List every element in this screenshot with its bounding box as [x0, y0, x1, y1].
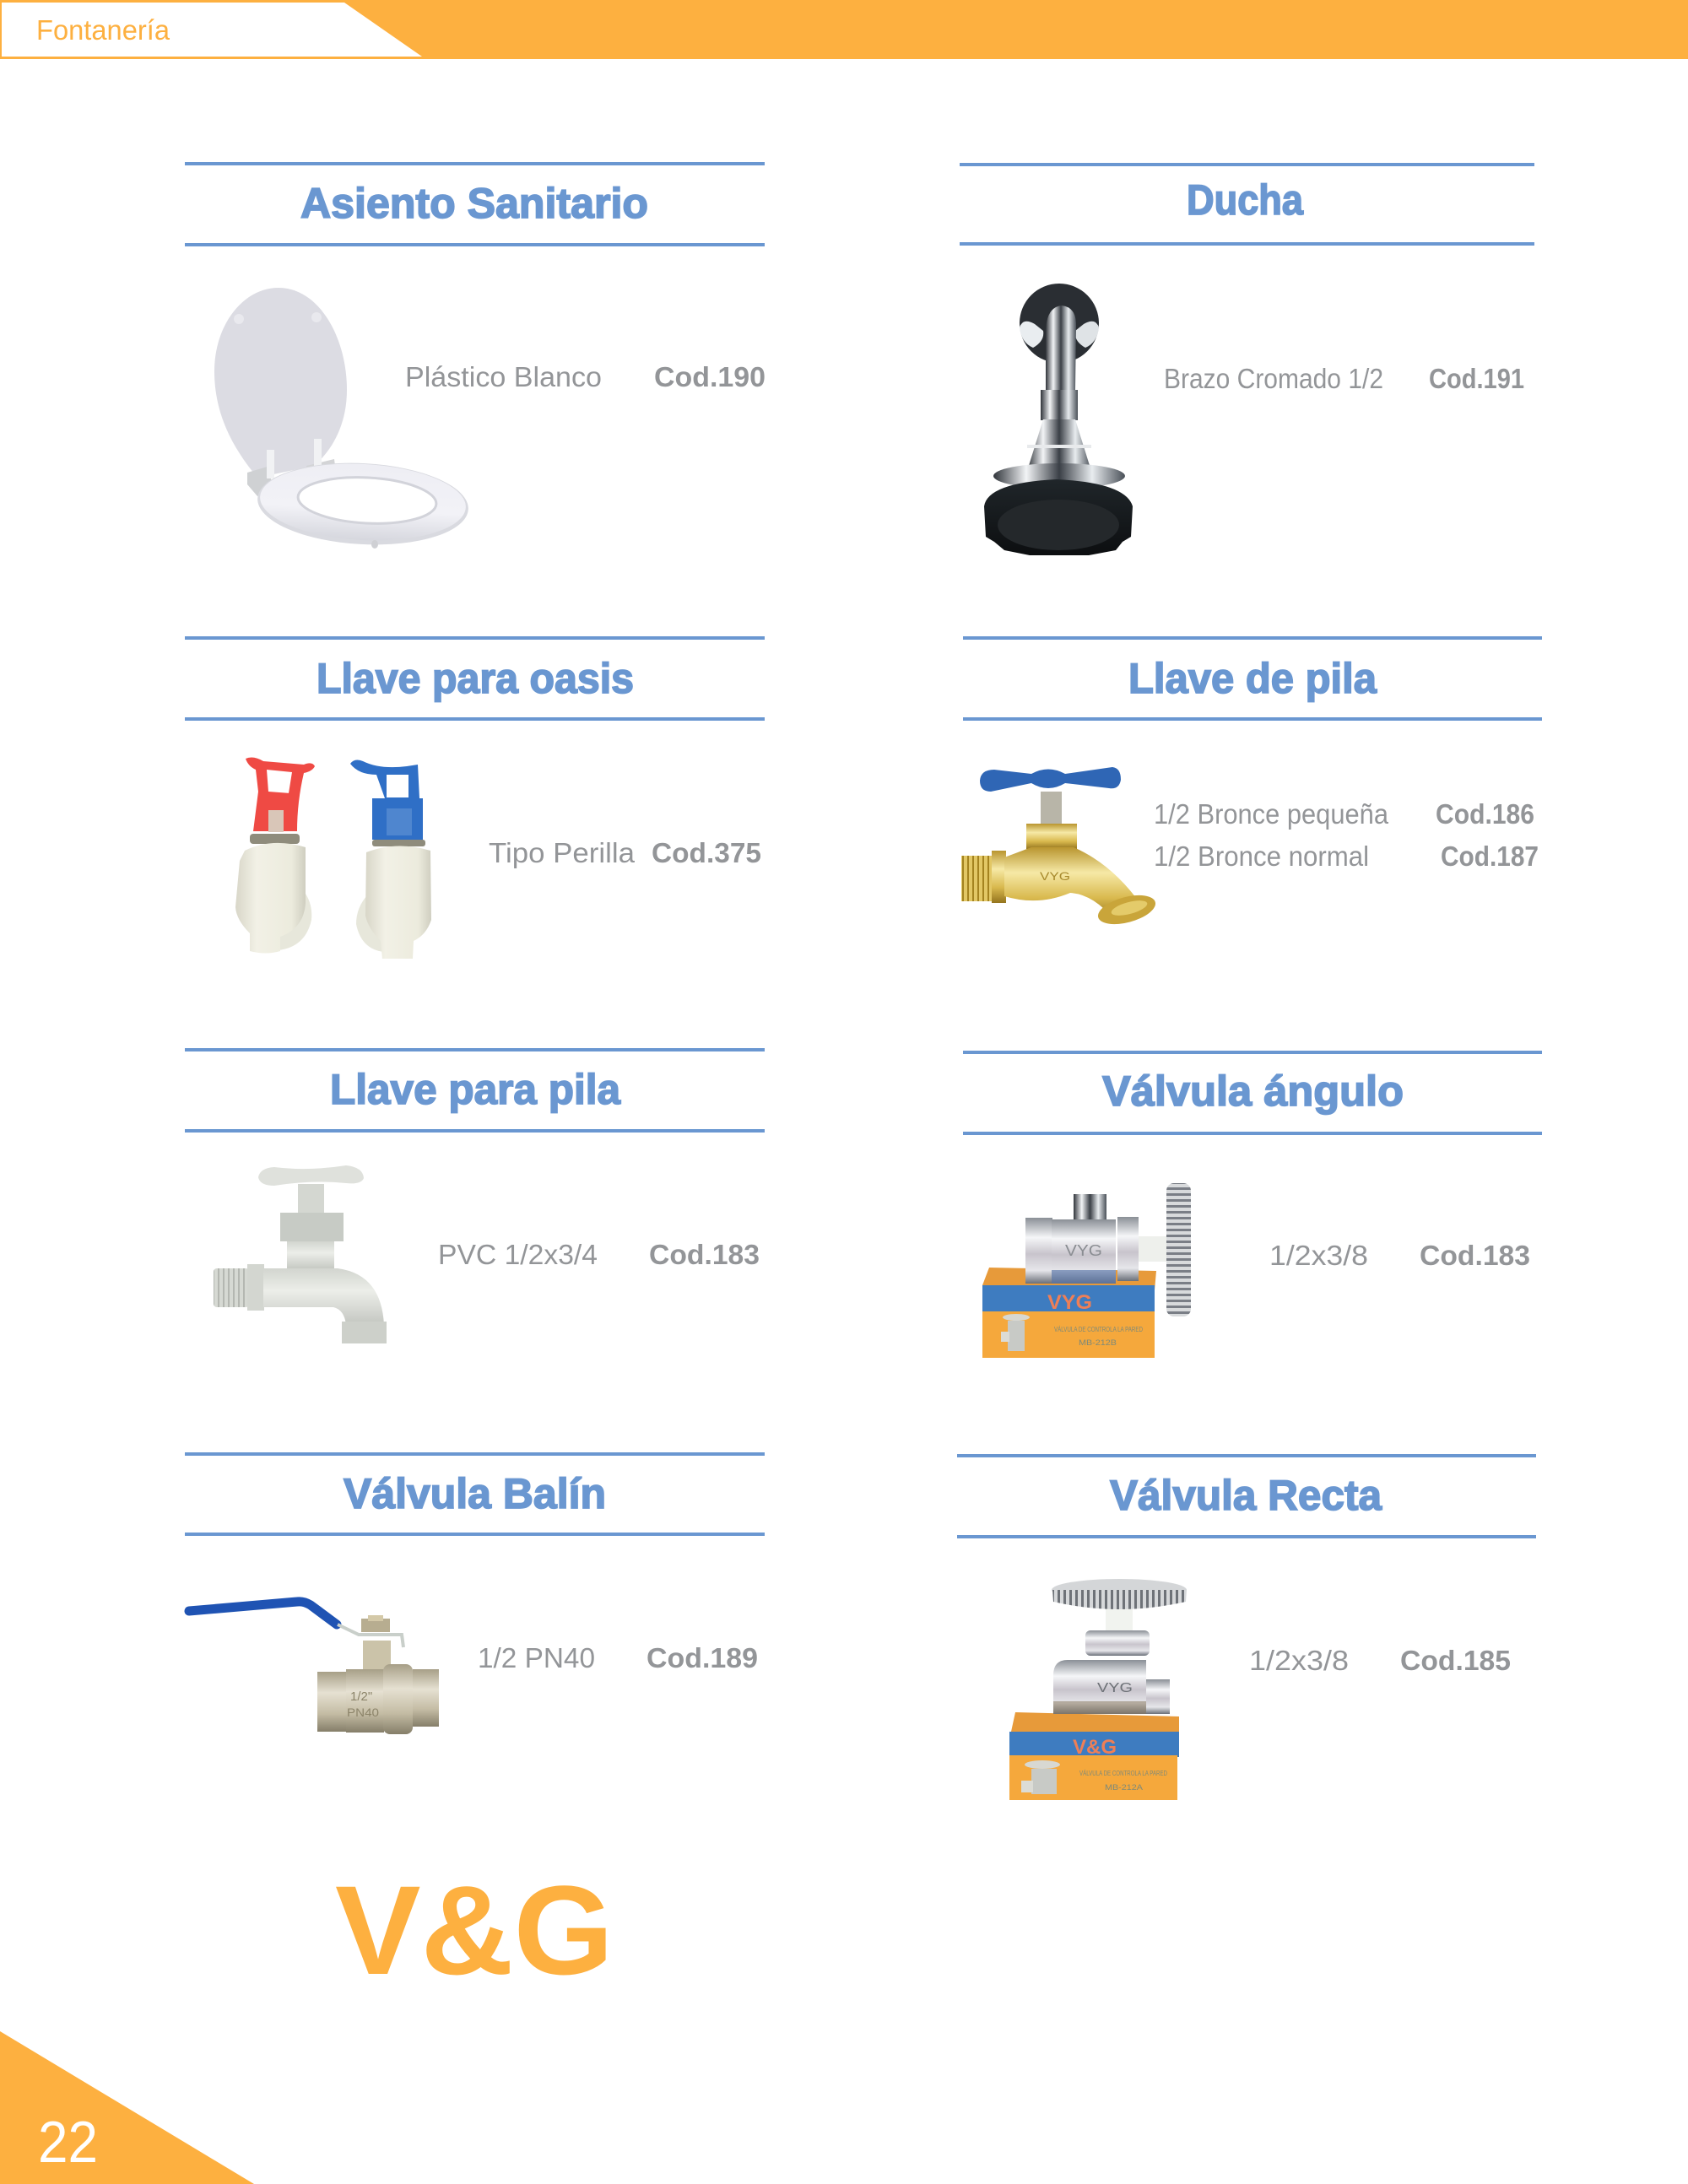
panel: Válvula Recta: [957, 1454, 1536, 1800]
panel: Llave para pila: [185, 1048, 765, 1343]
icon: blue tap: [350, 760, 431, 959]
panel: Llave para oasis: [185, 636, 765, 959]
page number: 22: [38, 2109, 98, 2175]
icon: ball valve: 1/2": [350, 1689, 372, 1704]
icon: angle valve with box: VÁLVULA DE CONTROLA LA PARED: [1054, 1326, 1143, 1333]
heading: Llave para pila: Llave para pila: [330, 1066, 621, 1113]
brand logo: V&G: V&G: [335, 1859, 614, 2001]
product code: Cod.183: [649, 1239, 760, 1270]
icon: shower head: [984, 284, 1133, 555]
product description: 1/2 Bronce pequeña: [1154, 798, 1389, 830]
product description: 1/2x3/8: [1249, 1645, 1349, 1676]
product description: PVC 1/2x3/4: [438, 1239, 598, 1270]
heading: Llave para oasis: Llave para oasis: [316, 655, 634, 702]
product description: Tipo Perilla: [489, 837, 636, 868]
product code: Cod.185: [1400, 1645, 1511, 1676]
icon: angle valve with box: MB-212B: [1079, 1338, 1117, 1347]
product code: Cod.187: [1441, 841, 1539, 872]
product description: 1/2 Bronce normal: [1154, 841, 1369, 872]
product code: Cod.183: [1420, 1240, 1530, 1271]
icon: straight valve with box: [1009, 1579, 1187, 1800]
heading: Válvula ángulo: Válvula ángulo: [1102, 1068, 1404, 1115]
product code: Cod.186: [1436, 798, 1534, 830]
icon: angle valve with box: VYG: [1065, 1242, 1102, 1259]
panel: Válvula ángulo: [963, 1051, 1542, 1358]
product description: Brazo Cromado 1/2: [1164, 363, 1383, 394]
icon: PVC tap: [214, 1165, 387, 1343]
product code: Cod.375: [652, 837, 761, 868]
heading: Llave de pila: Llave de pila: [1128, 655, 1377, 702]
icon: angle valve with box: [982, 1183, 1191, 1358]
product description: 1/2x3/8: [1269, 1240, 1368, 1271]
product code: Cod.190: [654, 361, 766, 392]
product code: Cod.189: [647, 1642, 758, 1673]
product code: Cod.191: [1429, 363, 1524, 394]
header band: [0, 0, 1688, 59]
icon: straight valve with box: VÁLVULA DE CONTROLA LA PARED: [1079, 1770, 1167, 1777]
product description: Plástico Blanco: [405, 361, 602, 392]
product description: 1/2 PN40: [478, 1642, 595, 1673]
icon: straight valve with box: MB-212A: [1105, 1783, 1143, 1792]
panel: Llave de pila: [961, 636, 1542, 930]
icon: brass tap with blue handle: [961, 767, 1159, 930]
header label: Fontanería: Fontanería: [36, 14, 170, 46]
icon: toilet seat: [214, 288, 470, 549]
icon: straight valve with box: VYG: [1097, 1681, 1133, 1695]
panel: Válvula Balín: [185, 1452, 765, 1734]
icon: ball valve: PN40: [347, 1706, 379, 1719]
footer triangle with page number: [0, 2031, 254, 2184]
icon: angle valve with box: VYG: [1047, 1291, 1092, 1314]
icon: ball valve: [189, 1602, 439, 1734]
heading: Válvula Recta: Válvula Recta: [1110, 1472, 1382, 1519]
panel: Asiento Sanitario: [185, 162, 766, 549]
heading: Válvula Balín: Válvula Balín: [344, 1470, 606, 1517]
panel: Ducha: [960, 163, 1534, 555]
icon: red tap: [235, 758, 315, 954]
heading: Ducha: Ducha: [1187, 176, 1304, 224]
icon: brass tap with blue handle: VYG: [1040, 869, 1070, 883]
icon: straight valve with box: V&G: [1073, 1736, 1117, 1759]
heading: Asiento Sanitario: Asiento Sanitario: [300, 180, 648, 227]
